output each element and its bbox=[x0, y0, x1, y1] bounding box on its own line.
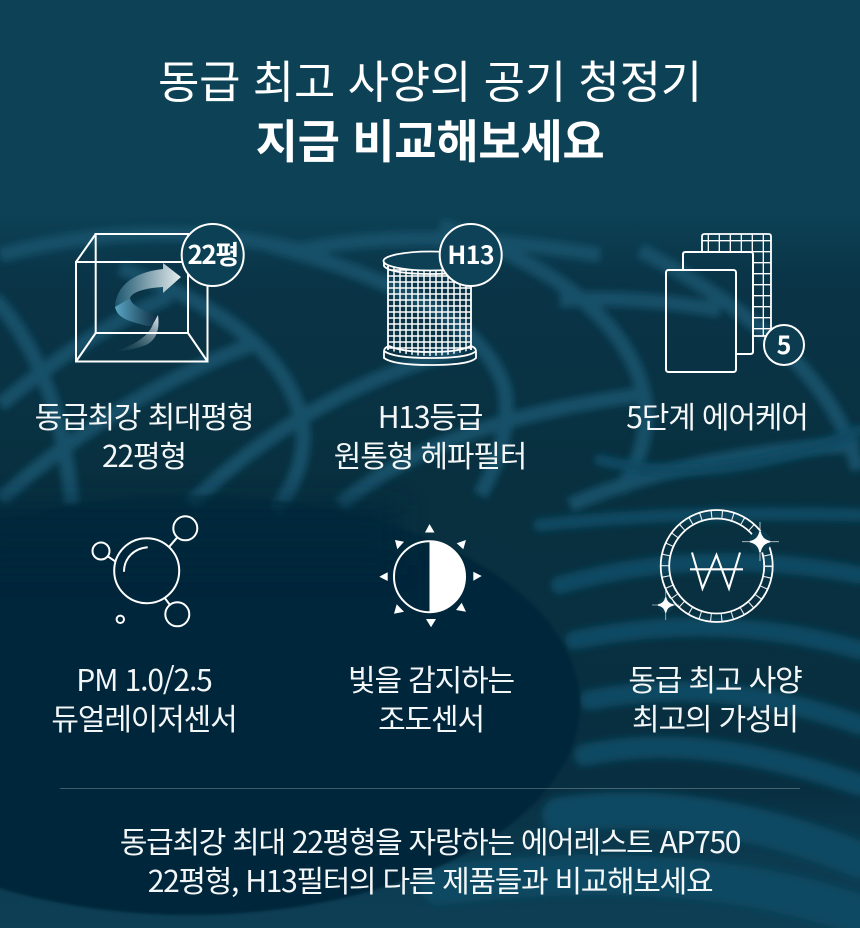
won sign bbox=[690, 552, 743, 588]
middle filter bbox=[683, 252, 753, 354]
icon: cylindrical HEPA filter, H13 badge bbox=[382, 223, 503, 366]
label: 22평형 bbox=[35, 393, 253, 476]
label: 22평형: 22평형 bbox=[102, 432, 186, 476]
label: H13 필터 bbox=[334, 393, 526, 476]
divider bbox=[60, 788, 800, 789]
filter mesh bbox=[388, 268, 470, 356]
title line 1: 동급 최고 사양의 공기 청정기 bbox=[158, 46, 702, 111]
fan blades lower right bbox=[440, 430, 860, 915]
label: PM 센서: 듀얼레이저센서 bbox=[51, 695, 237, 739]
footer text: 22평형, H13필터의 다른 제품들과 비교해보세요 bbox=[148, 857, 712, 901]
badge: 22평 bbox=[182, 224, 244, 286]
label: H13 필터: 원통형 헤파필터 bbox=[334, 432, 526, 476]
label: PM 센서 bbox=[51, 656, 237, 739]
front filter bbox=[666, 270, 736, 372]
back mesh filter bbox=[702, 234, 771, 336]
label: 조도센서: 빛을 감지하는 bbox=[348, 656, 514, 700]
label: 가성비: 동급 최고 사양 bbox=[628, 656, 802, 700]
label: 22평형: 동급최강 최대평형 bbox=[35, 393, 253, 437]
label: 조도센서: 조도센서 bbox=[378, 695, 484, 739]
sparkle small bbox=[652, 590, 679, 620]
label: PM 센서: PM 1.0/2.5 bbox=[76, 656, 212, 700]
dark disc bbox=[0, 495, 580, 915]
sparkle large bbox=[742, 522, 779, 561]
badge: H13 bbox=[440, 224, 502, 286]
label: 가성비: 최고의 가성비 bbox=[632, 695, 798, 739]
label: 조도센서 bbox=[348, 656, 514, 739]
badge: 5: 5 bbox=[777, 326, 791, 362]
footer text: 동급최강 최대 22평형을 자랑하는 에어레스트 AP750 bbox=[120, 818, 740, 862]
label: 가성비 bbox=[628, 656, 802, 739]
fan grille arcs bbox=[0, 225, 860, 512]
footer text bbox=[120, 818, 740, 901]
disc top soft shade bbox=[0, 505, 400, 565]
label: 5단계: 5단계 에어케어 bbox=[626, 393, 808, 437]
title line 2: 지금 비교해보세요 bbox=[256, 106, 604, 172]
air swoosh arrow bbox=[113, 263, 181, 352]
badge: H13: H13 bbox=[447, 236, 494, 272]
badge: 22평: 22평 bbox=[187, 235, 238, 272]
label: H13 필터: H13등급 bbox=[378, 393, 482, 437]
